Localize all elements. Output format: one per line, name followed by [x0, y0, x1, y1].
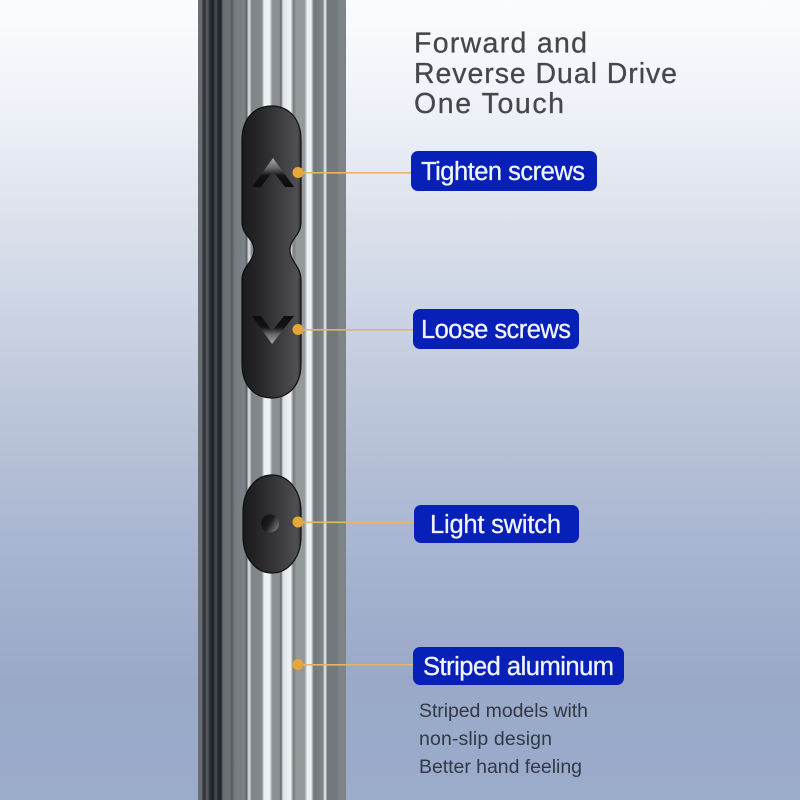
callout: striped aluminum	[292, 647, 624, 685]
switch body	[243, 475, 301, 573]
title: Reverse Dual Drive	[414, 58, 677, 90]
callout: light switch: Light switch	[430, 511, 561, 539]
icon: switch dot	[261, 514, 279, 532]
callout: striped aluminum: Striped aluminum	[423, 653, 614, 681]
leader line	[298, 329, 413, 331]
title: Forward and	[414, 28, 587, 60]
striped aluminum handle	[198, 0, 346, 800]
icon: down arrow	[252, 316, 294, 344]
marker dot	[292, 324, 304, 335]
leader line	[298, 664, 414, 666]
title: One Touch	[414, 88, 564, 120]
label	[413, 309, 579, 349]
label	[413, 647, 624, 685]
leader line	[298, 522, 414, 523]
label	[414, 505, 579, 543]
button body	[242, 106, 301, 398]
description text	[419, 700, 588, 778]
title	[414, 28, 677, 120]
callout: light switch	[292, 505, 579, 543]
description text: Striped models with	[419, 700, 588, 722]
description text: Better hand feeling	[419, 756, 582, 778]
marker dot	[292, 167, 304, 178]
marker dot	[292, 659, 304, 670]
callout: loose screws: Loose screws	[421, 316, 571, 344]
double rocker button	[242, 106, 301, 398]
light switch button	[243, 475, 301, 573]
marker dot	[292, 516, 304, 528]
callout: tighten screws	[292, 151, 597, 191]
label	[411, 151, 597, 191]
callout: loose screws	[292, 309, 579, 349]
callout: tighten screws: Tighten screws	[421, 158, 585, 186]
icon: up arrow	[252, 158, 294, 187]
description text: non-slip design	[419, 728, 552, 750]
leader line	[298, 172, 412, 174]
